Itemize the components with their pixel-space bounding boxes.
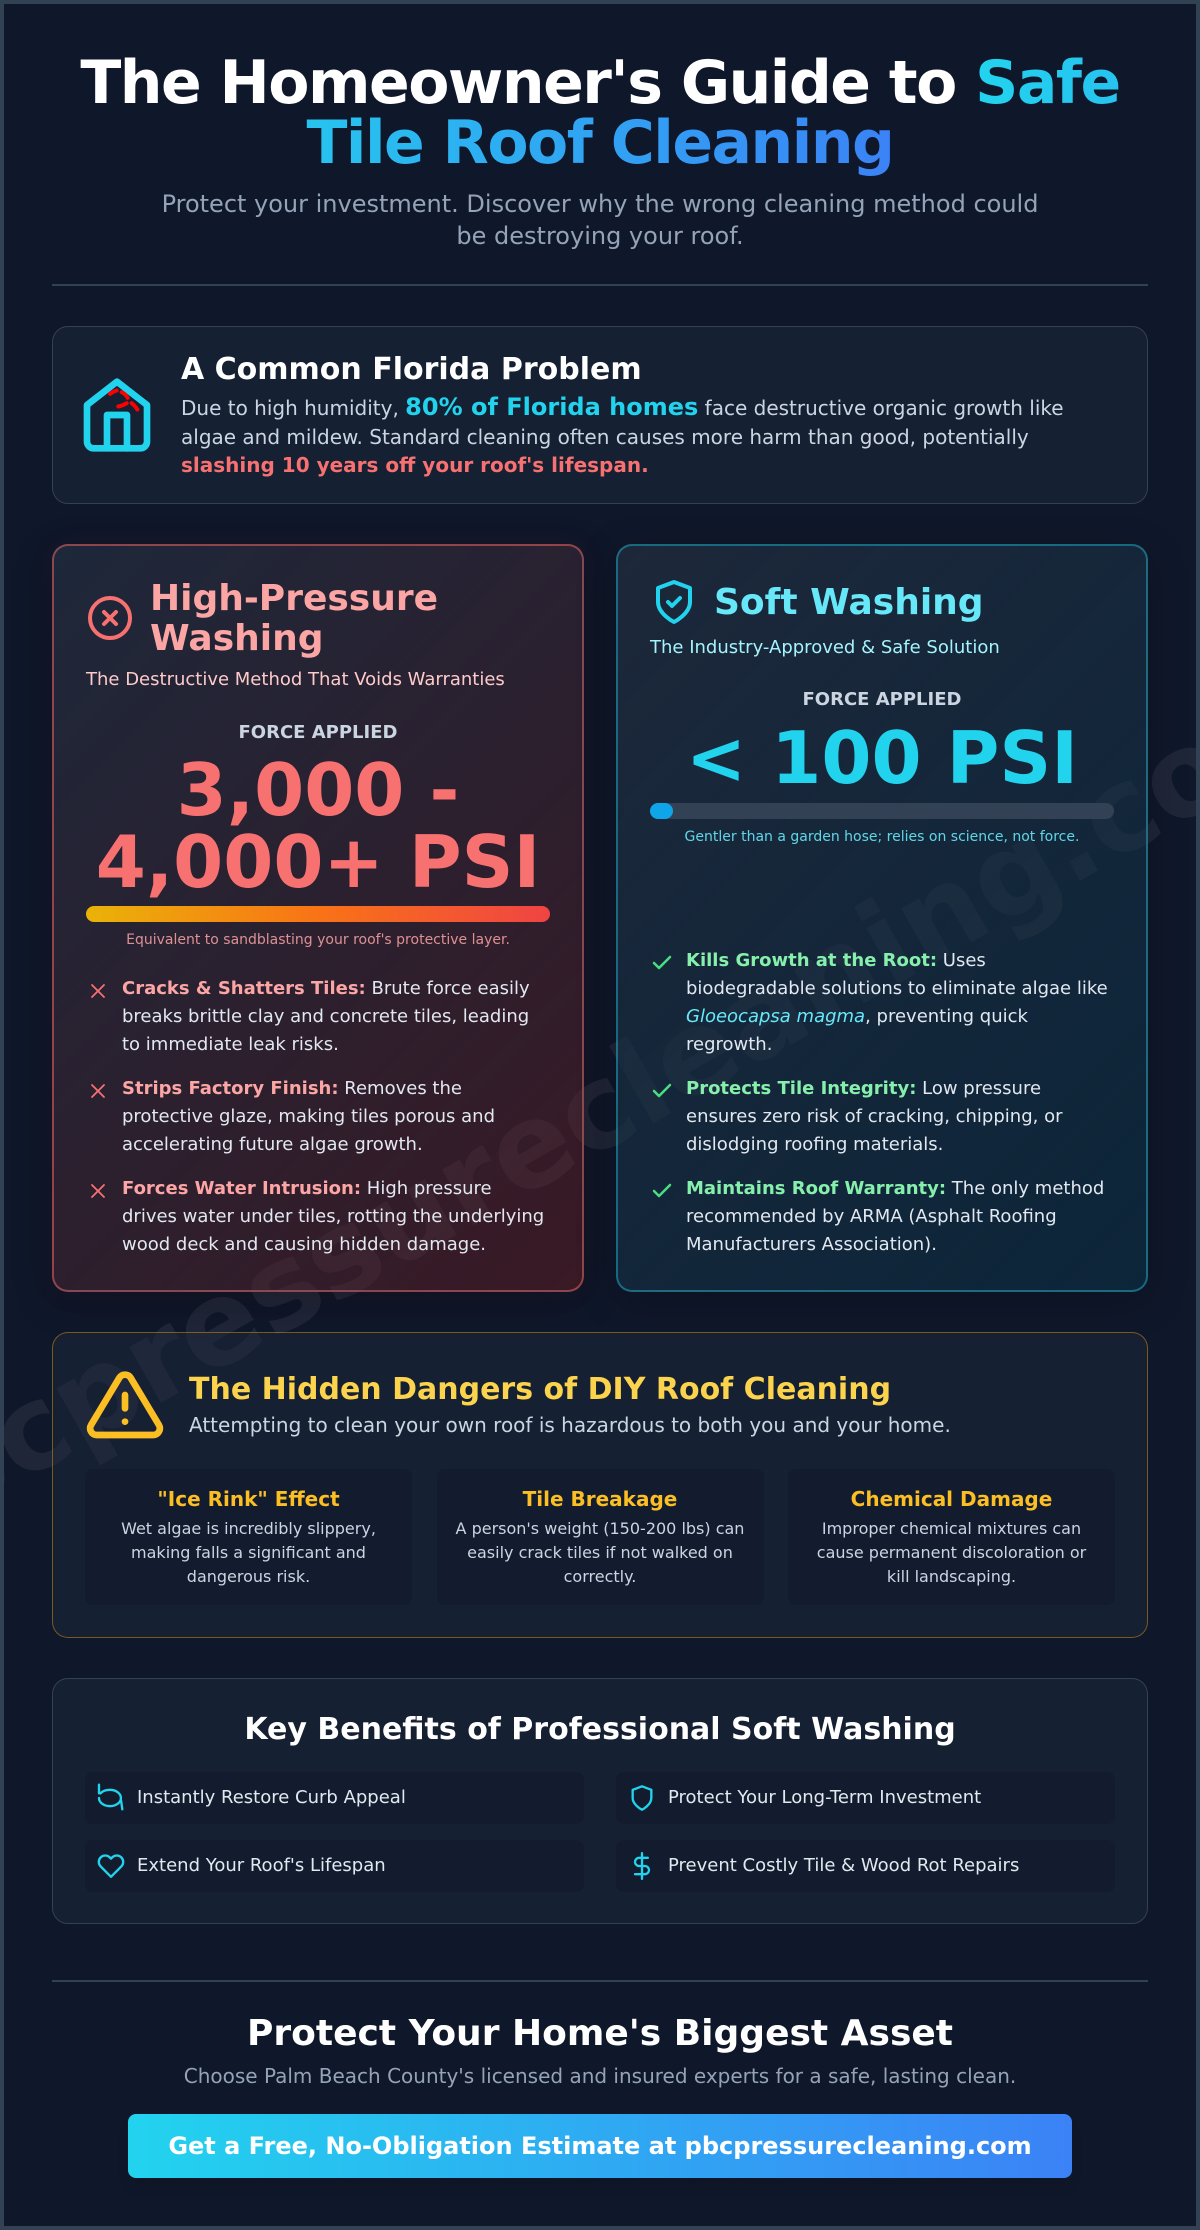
list item: warranty: Manufacturers Association).: [686, 1234, 937, 1255]
icon: heart: [98, 1854, 124, 1878]
list item: strips finish: protective glaze, making tiles porous and: [122, 1106, 495, 1127]
list item: strips finish: Strips Factory Finish: Removes the: [122, 1078, 462, 1099]
heading: common problem: A Common Florida Problem: [181, 352, 642, 387]
gauge: low pressure: [650, 803, 1114, 819]
list item: cracks: to immediate leak risks.: [122, 1034, 339, 1055]
benefit: curb appeal: [85, 1772, 584, 1824]
text: problem description: slashing 10 years off your roof's lifespan.: [181, 453, 649, 477]
list item: water intrusion: Forces Water Intrusion: High pressure: [122, 1178, 492, 1199]
benefit: repairs: [616, 1840, 1115, 1892]
footer heading: Protect Your Home's Biggest Asset: [247, 2013, 953, 2054]
panel: soft washing: [616, 544, 1148, 1292]
danger card: tile breakage: [436, 1469, 764, 1605]
benefit: curb appeal: Instantly Restore Curb Appeal: [137, 1787, 406, 1808]
title: The Homeowner's Guide to Safe: [80, 48, 1120, 118]
danger card: ice rink: "Ice Rink" Effect: [157, 1487, 340, 1511]
title: Tile Roof Cleaning: [306, 108, 894, 178]
text: problem description: [181, 393, 1064, 477]
icon: warning triangle: [86, 1371, 164, 1438]
icon: x: [91, 984, 105, 998]
icon: refresh: [98, 1784, 124, 1810]
danger card: tile breakage: easily crack tiles if not walked on: [467, 1543, 733, 1562]
gauge fill: [650, 803, 673, 819]
panel: common Florida problem: [52, 326, 1148, 504]
text: problem description: Due to high humidity, 80% of Florida homes face destructive organic growth like: [181, 393, 1064, 421]
icon: check: [652, 1184, 672, 1198]
list item: water intrusion: [91, 1178, 544, 1255]
stat: high pressure PSI: 4,000+ PSI: [96, 820, 540, 904]
text: problem description: algae and mildew. Standard cleaning often causes more harm than good, potentially: [181, 425, 1029, 449]
stat: soft wash PSI: < 100 PSI: [686, 716, 1078, 800]
list item: kills growth: Kills Growth at the Root: Uses: [686, 950, 986, 971]
panel: high-pressure washing: [52, 544, 584, 1292]
danger card: chemical damage: Improper chemical mixtures can: [822, 1519, 1081, 1538]
icon: x circle: [88, 596, 132, 640]
list item: strips finish: [91, 1078, 495, 1155]
benefit: investment: Protect Your Long-Term Investment: [668, 1787, 981, 1808]
list item: kills growth: biodegradable solutions to eliminate algae like: [686, 978, 1108, 999]
danger card: ice rink: making falls a significant and: [131, 1543, 366, 1562]
danger card: chemical damage: kill landscaping.: [887, 1567, 1016, 1586]
danger card: tile breakage: A person's weight (150-200 lbs) can: [456, 1519, 744, 1538]
panel: key benefits: [52, 1678, 1148, 1924]
list item: tile integrity: dislodging roofing materials.: [686, 1134, 943, 1155]
benefit: lifespan: Extend Your Roof's Lifespan: [137, 1855, 386, 1876]
caption: sandblasting: Equivalent to sandblasting your roof's protective layer.: [126, 932, 510, 948]
icon: dollar: [634, 1852, 650, 1880]
icon: shield check: [656, 580, 692, 624]
subheading: The Destructive Method That Voids Warranties: [86, 669, 505, 690]
list item: warranty: Maintains Roof Warranty: The only method: [686, 1178, 1104, 1199]
list item: cracks: breaks brittle clay and concrete tiles, leading: [122, 1006, 529, 1027]
list item: cracks: Cracks & Shatters Tiles: Brute force easily: [122, 978, 530, 999]
benefit: lifespan: [85, 1840, 584, 1892]
list item: cracks: [91, 978, 530, 1055]
call to action button: [128, 2114, 1072, 2178]
stat: high pressure PSI: [96, 748, 540, 904]
icon: shield: [632, 1785, 652, 1811]
list item: kills growth: Gloeocapsa magma, preventing quick: [686, 1006, 1028, 1027]
danger card: chemical damage: Chemical Damage: [851, 1487, 1052, 1511]
list item: warranty: recommended by ARMA (Asphalt Roofing: [686, 1206, 1057, 1227]
label: force applied: FORCE APPLIED: [239, 722, 397, 743]
danger card: chemical damage: cause permanent discoloration or: [817, 1543, 1086, 1562]
list item: strips finish: accelerating future algae growth.: [122, 1134, 423, 1155]
subheading: The Industry-Approved & Safe Solution: [650, 637, 1000, 658]
heading: high-pressure washing: [150, 578, 438, 659]
list item: warranty: [652, 1178, 1104, 1255]
list item: water intrusion: drives water under tiles, rotting the underlying: [122, 1206, 544, 1227]
danger card: tile breakage: Tile Breakage: [523, 1487, 677, 1511]
heading: high-pressure washing: High-Pressure: [150, 578, 438, 619]
title: [80, 48, 1120, 178]
icon: check: [652, 1084, 672, 1098]
icon: house with damage: [84, 378, 150, 452]
list item: kills growth: regrowth.: [686, 1034, 772, 1055]
subtitle: Protect your investment. Discover why the wrong cleaning method could: [162, 190, 1038, 218]
gauge: high pressure: [86, 906, 550, 922]
list item: water intrusion: wood deck and causing hidden damage.: [122, 1234, 486, 1255]
danger card: ice rink: [85, 1469, 412, 1605]
stat: high pressure PSI: 3,000 -: [177, 748, 459, 832]
caption: garden hose: Gentler than a garden hose; relies on science, not force.: [685, 829, 1079, 845]
heading: key benefits: Key Benefits of Professional Soft Washing: [244, 1712, 956, 1747]
danger card: tile breakage: correctly.: [564, 1567, 636, 1586]
heading: hidden dangers: The Hidden Dangers of DIY Roof Cleaning: [189, 1372, 891, 1407]
danger card: ice rink: dangerous risk.: [187, 1567, 310, 1586]
icon: x: [91, 1184, 105, 1198]
list item: tile integrity: ensures zero risk of cracking, chipping, or: [686, 1106, 1062, 1127]
subtitle: [162, 190, 1038, 250]
heading: soft washing: Soft Washing: [714, 582, 984, 623]
list item: kills growth: [652, 950, 1108, 1055]
icon: x: [91, 1084, 105, 1098]
label: force applied: FORCE APPLIED: [803, 689, 961, 710]
danger card: ice rink: Wet algae is incredibly slippery,: [121, 1519, 376, 1538]
call to action button: Get a Free, No-Obligation Estimate at pbcpressurecleaning.com: [168, 2132, 1032, 2160]
subtitle: be destroying your roof.: [456, 222, 744, 250]
list item: tile integrity: [652, 1078, 1063, 1155]
danger card: chemical damage: [788, 1469, 1115, 1605]
footer text: Choose Palm Beach County's licensed and insured experts for a safe, lasting clean.: [184, 2064, 1016, 2088]
heading: high-pressure washing: Washing: [150, 618, 324, 659]
text: dangers intro: Attempting to clean your own roof is hazardous to both you and your home.: [189, 1413, 951, 1437]
list item: tile integrity: Protects Tile Integrity: Low pressure: [686, 1078, 1041, 1099]
benefit: repairs: Prevent Costly Tile & Wood Rot Repairs: [668, 1855, 1019, 1876]
panel: hidden dangers: [52, 1332, 1148, 1638]
icon: check: [652, 956, 672, 970]
benefit: investment: [616, 1772, 1115, 1824]
